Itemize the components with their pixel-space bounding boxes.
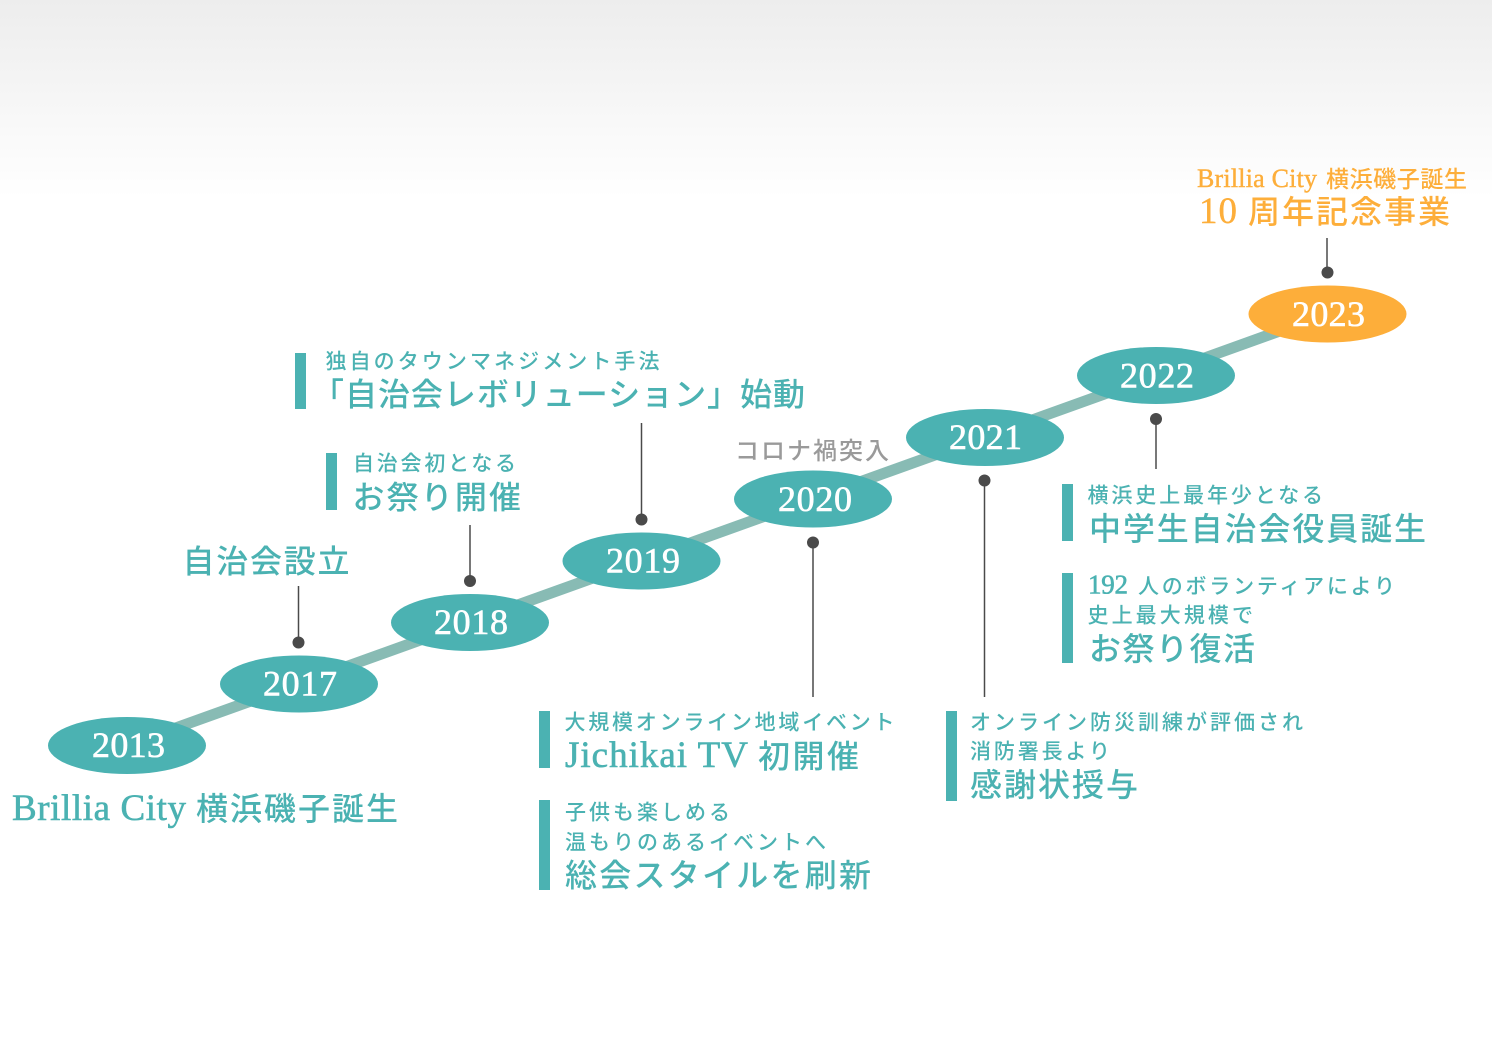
year node 2023: 2023 bbox=[1292, 294, 1365, 334]
callout: fire chief commendation: オンライン防災訓練が評価され bbox=[970, 710, 1303, 734]
callout: first festival: お祭り開催 bbox=[352, 480, 521, 516]
milestone 2021 bbox=[906, 409, 1303, 803]
callout: first festival: 自治会初となる bbox=[353, 452, 516, 476]
callout: association revolution: 「自治会レボリューション」始動 bbox=[312, 376, 805, 412]
milestone 2019 bbox=[295, 350, 805, 590]
callout: youngest officers: 中学生自治会役員誕生 bbox=[1089, 511, 1426, 547]
year node 2018 bbox=[391, 594, 549, 651]
pin 2020 bbox=[807, 536, 819, 697]
pin 2022 bbox=[1150, 413, 1162, 469]
callout: festival revival: 史上最大規模で bbox=[1088, 604, 1253, 628]
year node 2013 bbox=[48, 717, 206, 774]
year node 2019 bbox=[562, 532, 720, 590]
year node 2018: 2018 bbox=[434, 602, 508, 642]
label: association founded: 自治会設立 bbox=[182, 544, 350, 580]
label: Brillia City birth: Brillia City bbox=[12, 788, 186, 829]
pin 2021 bbox=[978, 474, 990, 697]
callout: first festival bbox=[326, 452, 521, 516]
callout: 10th anniversary: 周年記念事業 bbox=[1248, 194, 1450, 230]
callout: general meeting style: 総会スタイルを刷新 bbox=[565, 858, 871, 894]
year node 2020 bbox=[734, 470, 892, 528]
callout: Jichikai TV: 大規模オンライン地域イベント bbox=[564, 710, 894, 734]
label: corona period: コロナ禍突入 bbox=[735, 438, 889, 465]
callout: association revolution: 独自のタウンマネジメント手法 bbox=[326, 350, 660, 374]
year node 2013: 2013 bbox=[92, 725, 165, 765]
callout: Jichikai TV: 初開催 bbox=[758, 738, 859, 774]
callout: fire chief commendation: 感謝状授与 bbox=[970, 767, 1138, 803]
milestone 2020 bbox=[539, 438, 894, 894]
year node 2021 bbox=[906, 409, 1064, 466]
milestone 2022 bbox=[1062, 347, 1426, 667]
callout: youngest officers bbox=[1062, 484, 1426, 547]
year node 2022: 2022 bbox=[1120, 356, 1194, 396]
timeline connector bbox=[127, 314, 1327, 746]
year node 2022 bbox=[1077, 347, 1235, 404]
callout: fire chief commendation: 消防署長より bbox=[970, 740, 1110, 764]
milestone 2017 bbox=[182, 544, 378, 712]
year node 2023 bbox=[1248, 286, 1406, 342]
callout: fire chief commendation bbox=[946, 710, 1303, 803]
year node 2017: 2017 bbox=[263, 664, 337, 704]
label: Brillia City birth bbox=[12, 788, 398, 829]
callout: Jichikai TV bbox=[539, 710, 894, 776]
callout: 10th anniversary: Brillia City bbox=[1197, 164, 1317, 193]
milestone 2013 bbox=[12, 717, 398, 829]
callout: association revolution bbox=[295, 350, 805, 412]
callout: general meeting style: 温もりのあるイベントへ bbox=[565, 830, 826, 854]
year node 2020: 2020 bbox=[778, 479, 852, 519]
year node 2017 bbox=[220, 656, 378, 712]
callout: 10th anniversary: 10 bbox=[1199, 191, 1237, 232]
pin 2023 bbox=[1322, 238, 1334, 278]
callout: 10th anniversary: 横浜磯子誕生 bbox=[1326, 167, 1467, 192]
callout: youngest officers: 横浜史上最年少となる bbox=[1088, 484, 1323, 508]
callout: 10th anniversary bbox=[1197, 164, 1467, 232]
callout: general meeting style bbox=[539, 800, 871, 894]
callout: festival revival: 人のボランティアにより bbox=[1138, 574, 1395, 598]
pin 2017 bbox=[292, 586, 304, 648]
callout: festival revival: お祭り復活 bbox=[1089, 631, 1255, 667]
callout: festival revival: 192 bbox=[1088, 570, 1128, 600]
year node 2019: 2019 bbox=[606, 540, 680, 580]
callout: festival revival bbox=[1062, 570, 1395, 667]
callout: general meeting style: 子供も楽しめる bbox=[565, 800, 730, 824]
pin 2019 bbox=[636, 423, 648, 526]
label: Brillia City birth: 横浜磯子誕生 bbox=[196, 791, 398, 827]
pin 2018 bbox=[464, 525, 476, 587]
callout: Jichikai TV: Jichikai TV bbox=[565, 735, 748, 776]
year node 2021: 2021 bbox=[949, 417, 1022, 457]
milestone 2023 bbox=[1197, 164, 1467, 342]
milestone 2018 bbox=[326, 452, 549, 651]
